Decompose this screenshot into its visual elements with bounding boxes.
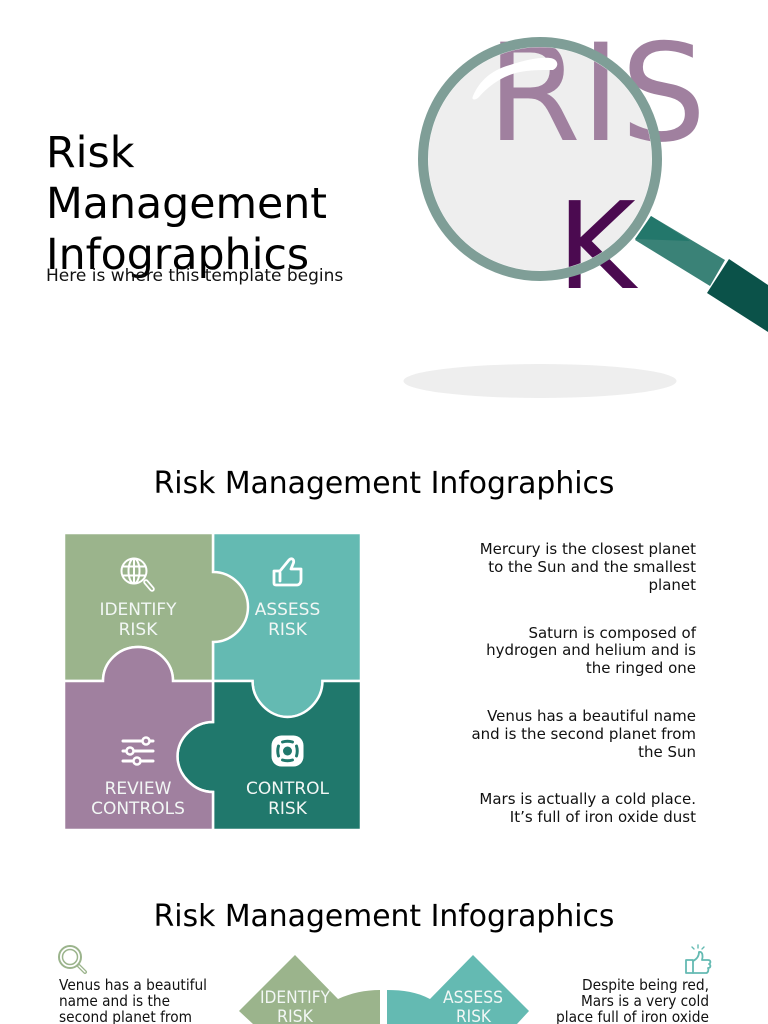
heading: lower section: Risk Management Infographics: [154, 899, 614, 934]
label: review controls: [91, 779, 185, 819]
label: control risk: RISK: [268, 799, 308, 819]
title: Risk: [46, 128, 135, 178]
piece: assess risk: [213, 533, 361, 717]
icon: life buoy: [272, 736, 304, 766]
shape: assess risk: [387, 955, 529, 1024]
text block: venus lower: Venus has a beautiful: [59, 977, 207, 994]
text block: saturn: the ringed one: [586, 659, 696, 677]
lens: [427, 46, 653, 272]
text block: venus: Venus has a beautiful name: [487, 707, 696, 725]
word RISK: K: [557, 178, 639, 317]
label: review controls: CONTROLS: [91, 799, 185, 819]
label: assess: [443, 988, 503, 1024]
label: identify: [260, 988, 331, 1024]
piece: review controls: [64, 647, 213, 830]
piece: control risk: [178, 681, 361, 830]
text block: mercury: Mercury is the closest planet: [480, 540, 696, 558]
text block: venus lower: [59, 977, 207, 1024]
icon: green magnifier: [59, 946, 85, 972]
label: identify risk: [99, 600, 177, 640]
text block: mars: [479, 790, 696, 826]
text block: mercury: [480, 540, 696, 594]
word RISK: [487, 15, 706, 317]
handle: [635, 216, 768, 332]
word RISK: RIS: [487, 15, 706, 172]
label: assess risk: RISK: [268, 620, 308, 640]
text block: mars lower: [556, 977, 709, 1024]
icon: globe search: [122, 558, 152, 589]
text block: mercury: to the Sun and the smallest: [488, 558, 696, 576]
label: review controls: REVIEW: [105, 779, 172, 799]
puzzle diagram: [64, 533, 361, 830]
label: identify: IDENTIFY: [260, 988, 331, 1007]
label: control risk: [246, 779, 330, 819]
label: identify risk: RISK: [119, 620, 158, 640]
label: assess risk: ASSESS: [255, 600, 320, 620]
shape: identify risk: [239, 955, 380, 1024]
icon: teal thumbs up: [686, 945, 710, 973]
text block: mars lower: Mars is a very cold: [581, 993, 709, 1010]
lens rim: [423, 42, 657, 276]
label: assess: ASSESS: [443, 988, 503, 1007]
piece: identify risk: [64, 533, 248, 681]
text block: saturn: [486, 624, 697, 677]
text block: venus: and is the second planet from: [471, 725, 696, 743]
ground shadow: [404, 364, 676, 398]
text block: venus: the Sun: [638, 743, 696, 761]
title: [46, 128, 327, 280]
magnifying glass with RISK lettering: [404, 15, 768, 398]
label: identify risk: IDENTIFY: [99, 600, 177, 620]
label: assess risk: [255, 600, 320, 640]
icon: thumbs up: [274, 559, 301, 585]
title: Management: [46, 179, 327, 229]
text block: saturn: hydrogen and helium and is: [486, 641, 696, 659]
text block: venus lower: name and is the: [59, 993, 170, 1010]
text block: mars lower: Despite being red,: [582, 977, 709, 994]
text block: saturn: Saturn is composed of: [528, 624, 697, 642]
title: Infographics: [46, 230, 309, 280]
lens highlight: [472, 58, 557, 100]
icon: sliders: [123, 738, 153, 764]
subtitle: Here is where this template begins: [46, 266, 343, 286]
text block: mars: It’s full of iron oxide dust: [510, 808, 696, 826]
text block: mars: Mars is actually a cold place.: [479, 790, 696, 808]
label: control risk: CONTROL: [246, 779, 330, 799]
heading: puzzle section: Risk Management Infographics: [154, 466, 614, 501]
text block: mercury: planet: [648, 576, 696, 594]
text block: venus: [471, 707, 696, 761]
